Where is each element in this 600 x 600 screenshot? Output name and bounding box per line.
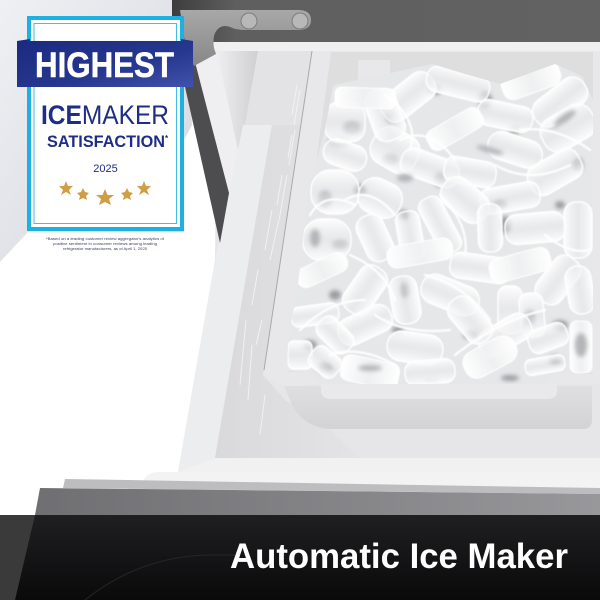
hinge bracket (180, 10, 311, 66)
badge frame (27, 16, 184, 231)
footnote asterisk: * (165, 134, 169, 143)
badge footnote: *Based on a leading customer review aggregator's analytics of (46, 236, 165, 241)
upper side recess (217, 51, 258, 150)
upper side rib (245, 51, 314, 125)
drawer front curve (85, 555, 235, 600)
caption bar (0, 515, 600, 600)
freezer door panel (0, 0, 192, 262)
upper side band (195, 50, 238, 193)
badge footnote: positive sentiment in consumer reviews among leading (53, 241, 157, 246)
drawer: interior and walls (178, 42, 600, 472)
badge footnote: refrigerator manufacturers, as of April 1, 2025 (63, 246, 148, 251)
badge footnote (46, 236, 165, 251)
drawer interior (178, 50, 600, 472)
badge inner line (34, 24, 176, 224)
dark gaps between the ice (303, 85, 583, 384)
lower side inner panel (215, 125, 360, 458)
tray front lip (321, 383, 557, 399)
tray front bucket (284, 386, 592, 429)
black drawer front (15, 515, 600, 600)
white front pill (143, 472, 600, 490)
drawer top rim (213, 42, 600, 51)
gasket strip (63, 479, 600, 494)
banner heading: HIGHEST (35, 46, 174, 85)
hinge screw (241, 13, 257, 29)
tray rim (263, 51, 600, 392)
lower side outer band (178, 125, 272, 472)
drawer front top edge (35, 472, 600, 515)
year: 2025 (93, 163, 118, 175)
upper dark fridge body (172, 0, 600, 42)
side ridge highlights (240, 85, 300, 435)
award badge (17, 16, 193, 231)
ice tray (263, 51, 600, 429)
translucent ice pieces (288, 64, 600, 386)
tray tab (358, 60, 390, 90)
icemaker heading: ICEMAKER (41, 100, 169, 130)
grey ice inclusions (310, 107, 587, 371)
hinge screw (292, 13, 308, 29)
ice cubes (280, 58, 600, 391)
drawer floor rim (178, 458, 600, 472)
ice base (288, 64, 593, 374)
bright solid ice pieces (293, 58, 592, 391)
tray outer edge line (264, 51, 312, 370)
rating stars (59, 181, 151, 205)
silver drawer edge (35, 488, 600, 515)
tray back wall (288, 52, 593, 374)
satisfaction heading: SATISFACTION (47, 132, 165, 151)
crescent highlights across the ice (300, 95, 590, 365)
badge inner panel (31, 20, 180, 227)
caption: Automatic Ice Maker (230, 537, 568, 576)
dark door edge strip (184, 60, 229, 243)
ribbon banner (17, 39, 193, 87)
